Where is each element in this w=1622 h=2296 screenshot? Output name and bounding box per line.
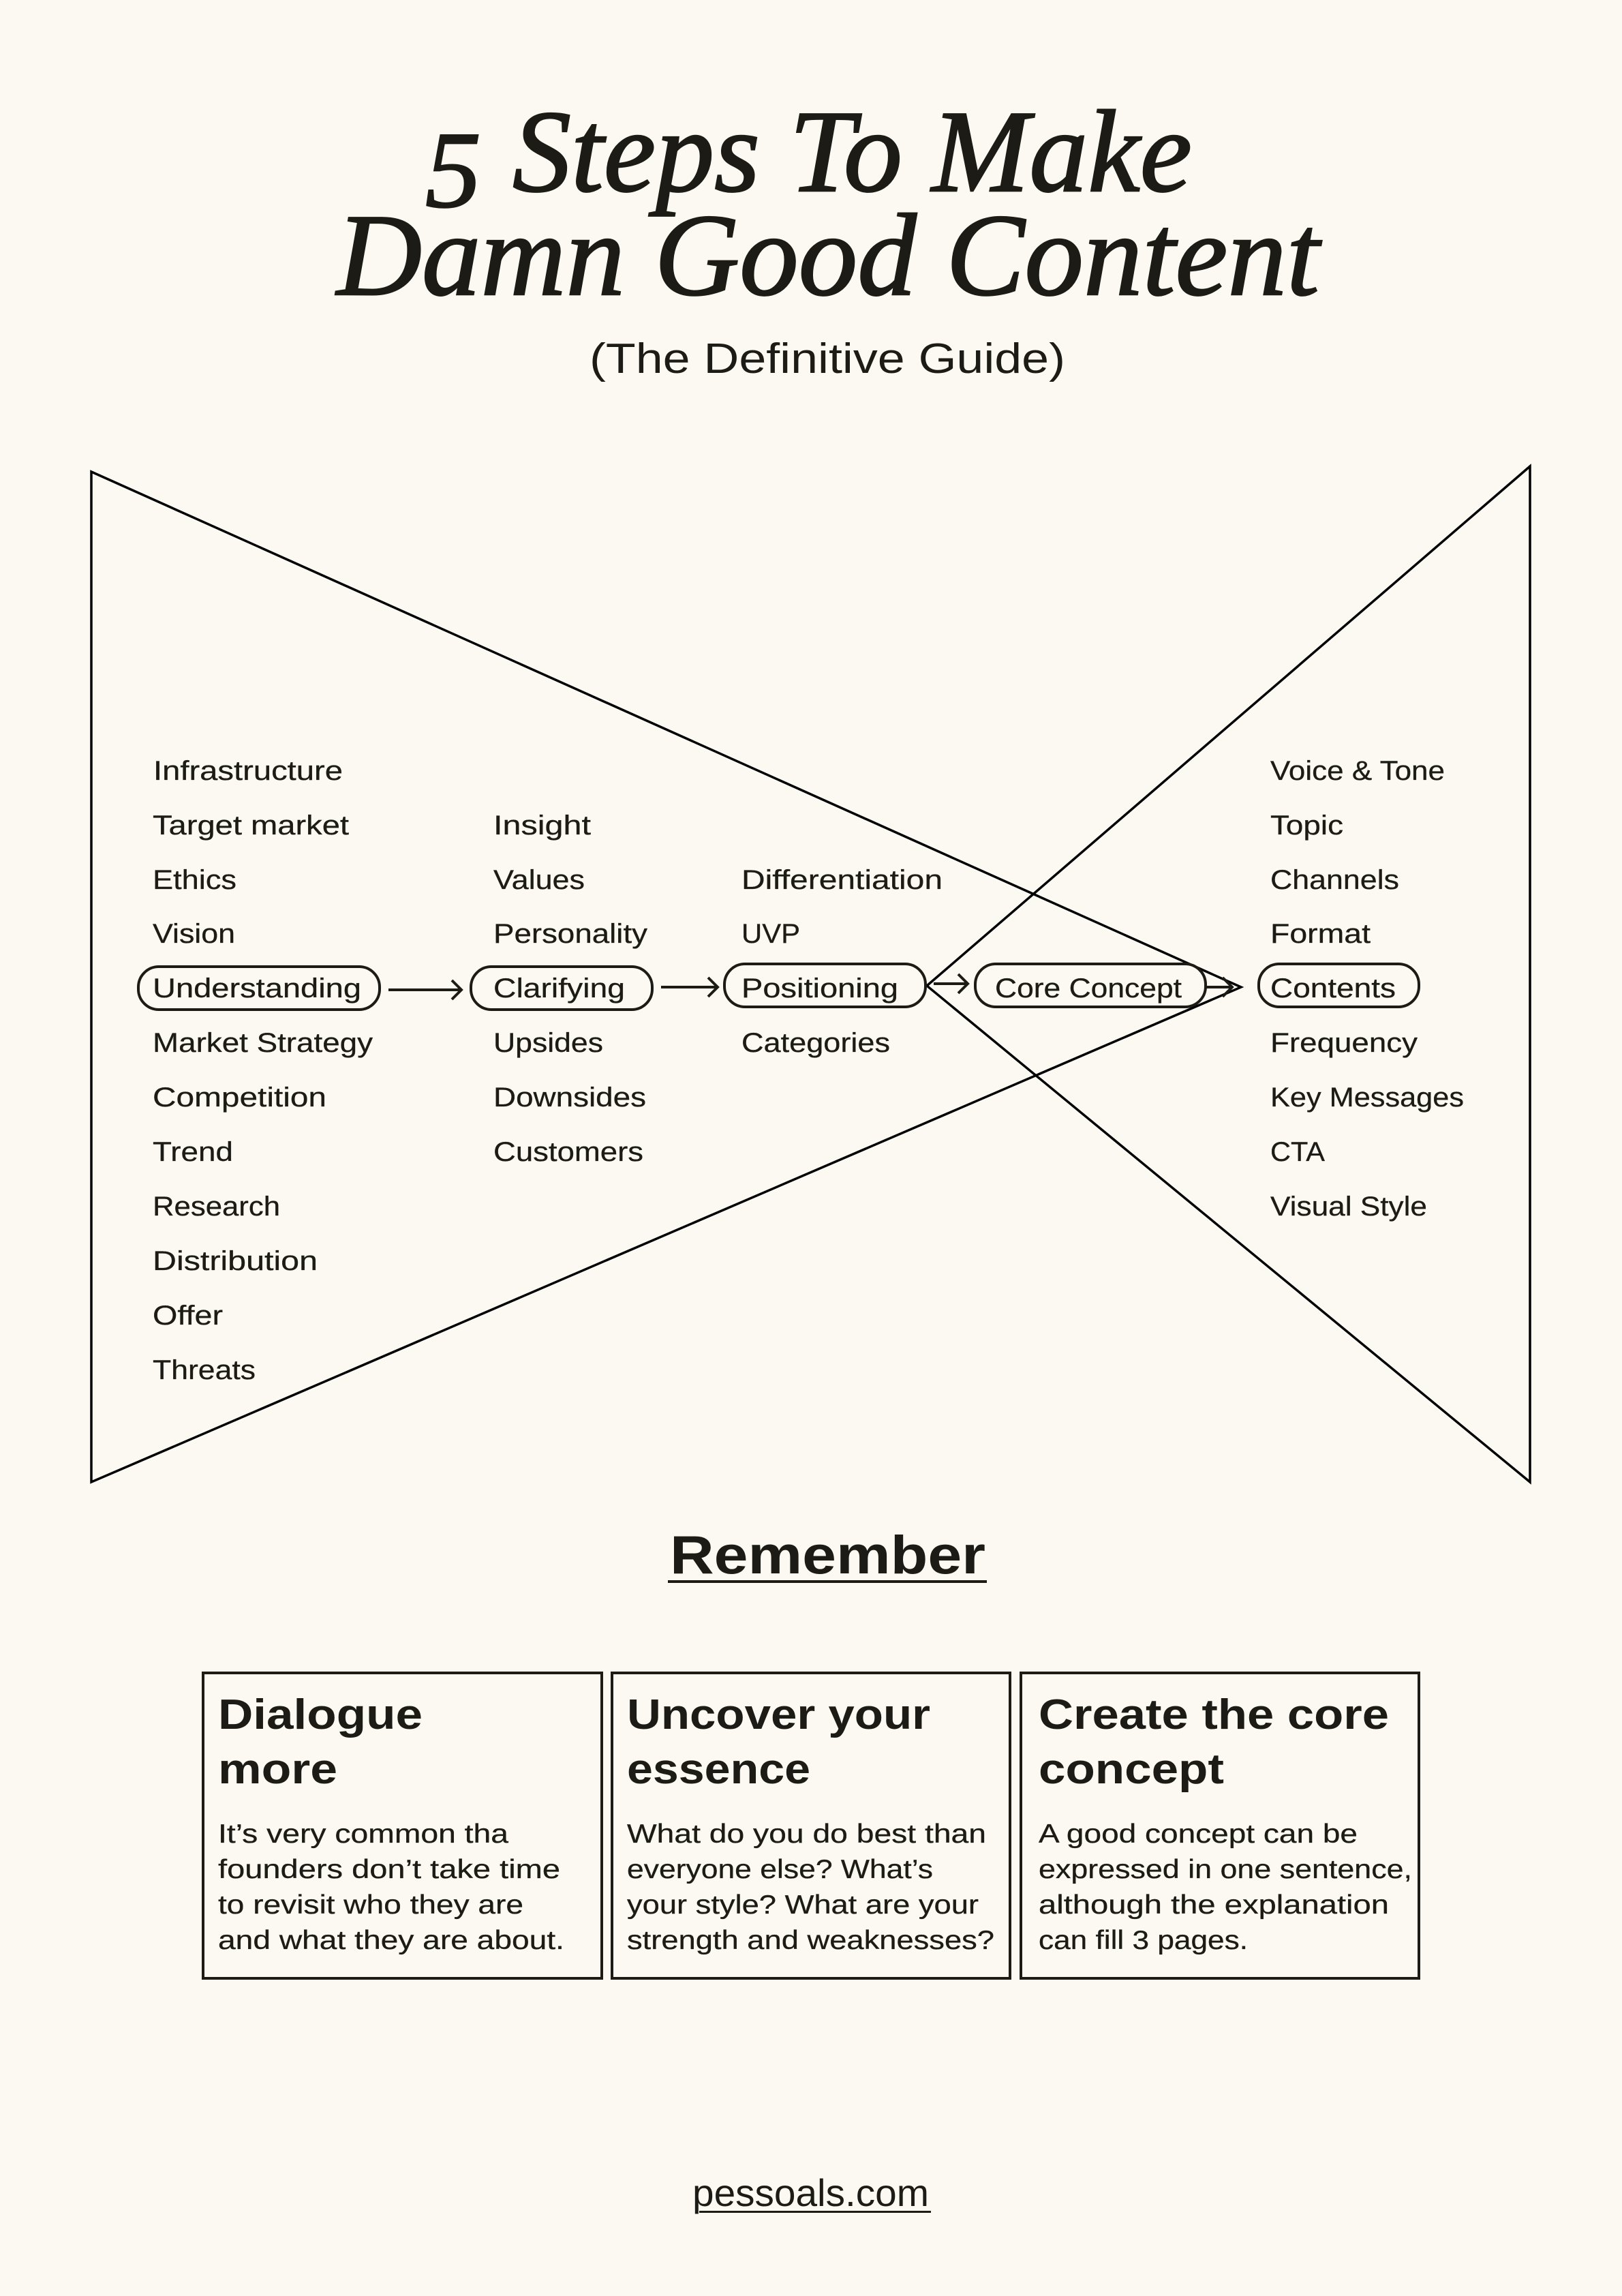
card heading: dialogue more: more xyxy=(218,1746,337,1793)
card text: uncover your essence: strength and weaknesses? xyxy=(627,1926,994,1955)
card text: dialogue more xyxy=(218,1819,564,1955)
card heading: dialogue more xyxy=(218,1691,423,1793)
card heading: create the core concept: concept xyxy=(1039,1746,1224,1793)
column: contents: Channels xyxy=(1270,865,1399,895)
column: understanding: Infrastructure xyxy=(153,756,343,786)
panel: create the core concept xyxy=(1021,1673,1419,1978)
card text: create the core concept: can fill 3 pages. xyxy=(1039,1926,1248,1955)
heading: remember: Remember xyxy=(670,1524,985,1585)
card text: uncover your essence: everyone else? What’s xyxy=(627,1855,933,1884)
card text: dialogue more: and what they are about. xyxy=(218,1926,564,1955)
column: positioning: UVP xyxy=(741,919,800,949)
column: clarifying xyxy=(493,811,647,1167)
core concept label: Core Concept xyxy=(995,973,1182,1003)
card text: create the core concept: expressed in one sentence, xyxy=(1039,1855,1412,1884)
card text: create the core concept: A good concept can be xyxy=(1039,1819,1358,1849)
card text: create the core concept xyxy=(1039,1819,1412,1955)
column: contents: CTA xyxy=(1270,1137,1325,1167)
column: contents: Key Messages xyxy=(1270,1083,1464,1113)
column: clarifying: Values xyxy=(493,865,585,895)
column: understanding: Distribution xyxy=(153,1246,318,1276)
pill: clarifying xyxy=(471,967,652,1010)
arrow: positioning to core concept xyxy=(934,974,968,993)
pill: positioning xyxy=(724,964,925,1007)
left funnel triangle xyxy=(91,472,1241,1482)
column: positioning: Categories xyxy=(741,1028,890,1058)
card text: dialogue more: founders don’t take time xyxy=(218,1855,560,1884)
card heading: uncover your essence: essence xyxy=(627,1746,810,1793)
column: clarifying: Personality xyxy=(493,919,647,949)
column: contents: Voice & Tone xyxy=(1270,756,1445,786)
column: contents: Topic xyxy=(1270,811,1343,841)
arrow: clarifying to positioning xyxy=(661,978,718,997)
column: understanding xyxy=(153,756,373,1385)
column: clarifying: Clarifying xyxy=(493,973,625,1003)
column: understanding: Target market xyxy=(153,811,349,841)
card heading: create the core concept: Create the core xyxy=(1039,1691,1389,1738)
arrow: core concept to contents xyxy=(1206,978,1232,997)
panel: dialogue more xyxy=(203,1673,602,1978)
column: clarifying: Downsides xyxy=(493,1083,646,1113)
title: 5 xyxy=(425,109,481,230)
column: understanding: Ethics xyxy=(153,865,236,895)
column: contents: Frequency xyxy=(1270,1028,1418,1058)
panel: uncover your essence xyxy=(612,1673,1010,1978)
card heading: uncover your essence: Uncover your xyxy=(627,1691,930,1738)
column: positioning xyxy=(741,865,943,1058)
title xyxy=(335,87,1322,320)
card text: uncover your essence xyxy=(627,1819,994,1955)
column: contents xyxy=(1270,756,1464,1222)
card text: dialogue more: It’s very common tha xyxy=(218,1819,508,1849)
card heading: create the core concept xyxy=(1039,1691,1389,1793)
column: positioning: Positioning xyxy=(741,973,898,1003)
pill: understanding xyxy=(138,967,380,1010)
footer url: pessoals.com xyxy=(692,2171,929,2214)
subtitle: (The Definitive Guide) xyxy=(590,335,1065,382)
column: clarifying: Insight xyxy=(493,811,591,841)
card heading: dialogue more: Dialogue xyxy=(218,1691,423,1738)
column: understanding: Understanding xyxy=(153,973,361,1003)
column: contents: Contents xyxy=(1270,973,1396,1003)
column: understanding: Trend xyxy=(153,1137,233,1167)
column: understanding: Vision xyxy=(153,919,235,949)
column: clarifying: Upsides xyxy=(493,1028,603,1058)
column: positioning: Differentiation xyxy=(741,865,943,895)
title: Steps To Make xyxy=(512,87,1192,217)
column: understanding: Research xyxy=(153,1192,280,1222)
card text: create the core concept: although the explanation xyxy=(1039,1890,1389,1920)
column: contents: Format xyxy=(1270,919,1371,949)
pill: contents xyxy=(1259,964,1419,1007)
card text: uncover your essence: your style? What are your xyxy=(627,1890,979,1920)
column: understanding: Market Strategy xyxy=(153,1028,373,1058)
card text: uncover your essence: What do you do best than xyxy=(627,1819,986,1849)
title: Damn Good Content xyxy=(335,191,1322,320)
arrow: understanding to clarifying xyxy=(388,980,461,999)
card heading: uncover your essence xyxy=(627,1691,930,1793)
column: understanding: Competition xyxy=(153,1083,326,1113)
card text: dialogue more: to revisit who they are xyxy=(218,1890,523,1920)
bow-tie funnel diagram xyxy=(91,466,1530,1482)
column: understanding: Threats xyxy=(153,1355,256,1385)
column: understanding: Offer xyxy=(153,1301,223,1331)
pill: core concept xyxy=(975,964,1206,1007)
column: clarifying: Customers xyxy=(493,1137,643,1167)
right funnel triangle xyxy=(927,466,1530,1482)
column: contents: Visual Style xyxy=(1270,1192,1427,1222)
